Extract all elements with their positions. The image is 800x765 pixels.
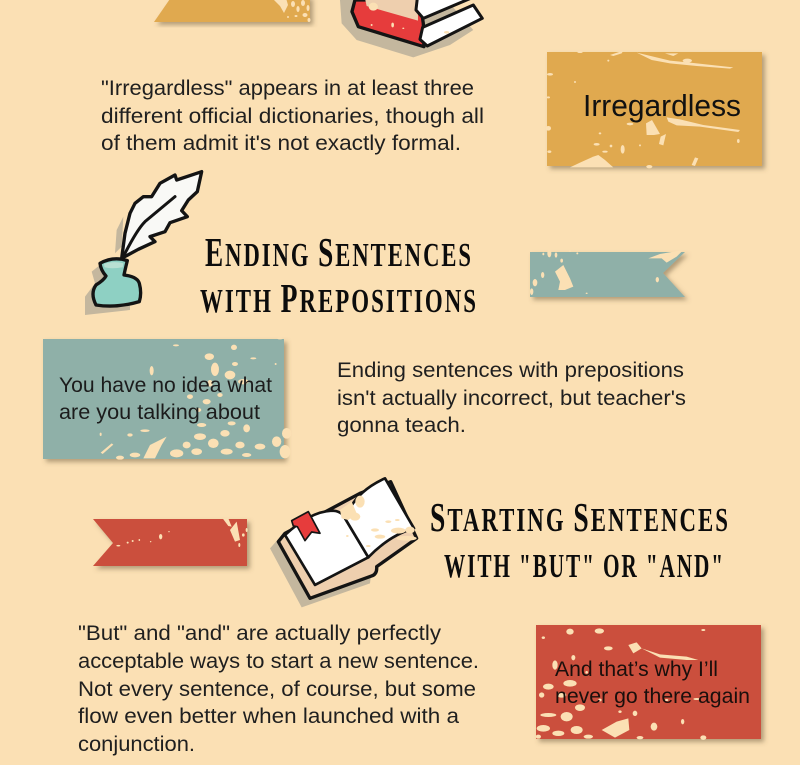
example card: prepositions <box>43 337 291 460</box>
body text: but and and: flow even better when launched with a <box>78 704 459 728</box>
body text: but and and: "But" and "and" are actually perfectly <box>78 621 441 645</box>
section: irregardless <box>101 0 762 168</box>
example card: but and and: never go there again <box>555 684 750 708</box>
body text: prepositions: gonna teach. <box>337 413 466 437</box>
icon: open book <box>270 478 417 607</box>
teal ribbon <box>530 249 685 297</box>
body text: irregardless: of them admit it's not exactly formal. <box>101 131 461 155</box>
example card: irregardless: Irregardless <box>583 88 741 123</box>
heading: starting sentences with but or and: STARTING SENTENCES <box>430 494 730 540</box>
body text: but and and: conjunction. <box>78 732 195 756</box>
example card: but and and: And that’s why I’ll <box>555 657 718 681</box>
example card: but and and <box>536 625 761 740</box>
yellow ribbon <box>154 0 310 22</box>
icon: stacked books <box>340 0 482 57</box>
example card: irregardless <box>546 51 762 168</box>
heading: ending sentences with prepositions <box>200 229 478 321</box>
heading: ending sentences with prepositions: ENDING SENTENCES <box>205 229 473 275</box>
body text: irregardless: different official dictionaries, though all <box>101 104 484 128</box>
body text: but and and: acceptable ways to start a new sentence. <box>78 649 479 673</box>
section: starting sentences with but or and <box>78 478 761 756</box>
icon: quill and inkwell <box>85 172 202 315</box>
section: ending sentences with prepositions <box>43 172 692 460</box>
example card: prepositions: You have no idea what <box>59 373 272 397</box>
body text: prepositions: isn't actually incorrect, but teacher's <box>337 386 686 410</box>
body text: irregardless: "Irregardless" appears in at least three <box>101 76 474 100</box>
example card: prepositions: are you talking about <box>59 400 260 424</box>
body text: prepositions: Ending sentences with prepositions <box>337 358 684 382</box>
red ribbon <box>93 518 248 566</box>
body text: but and and: Not every sentence, of course, but some <box>78 677 476 701</box>
heading: starting sentences with but or and <box>430 494 730 585</box>
heading: ending sentences with prepositions: WITH PREPOSITIONS <box>200 275 478 321</box>
